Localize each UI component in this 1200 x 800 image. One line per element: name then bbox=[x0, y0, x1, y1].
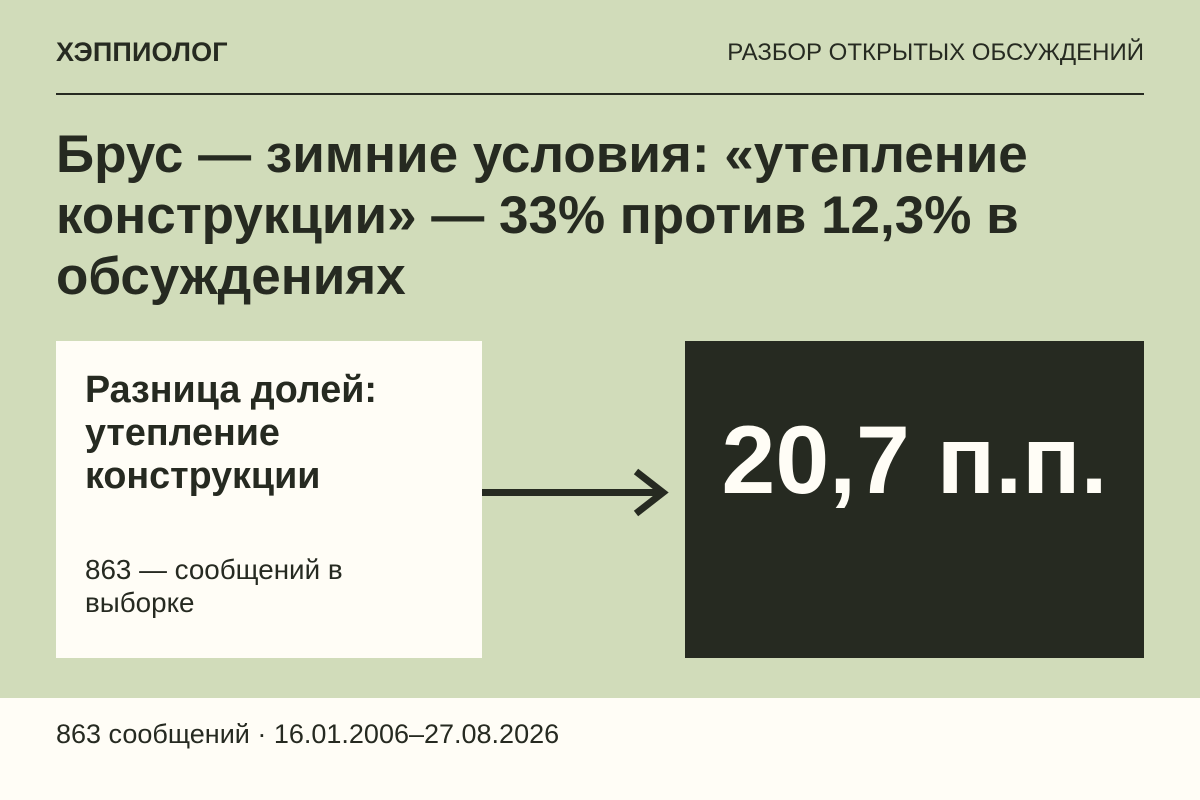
brand name: ХЭППИОЛОГ bbox=[56, 37, 228, 67]
title: конструкции» — 33% против 12,3% в bbox=[56, 186, 1019, 245]
footer band bbox=[0, 698, 1200, 800]
metric value text: 20,7 п.п. bbox=[721, 405, 1108, 514]
sample size note: 863 — сообщений в bbox=[85, 554, 343, 585]
footer text: 863 сообщений · 16.01.2006–27.08.2026 bbox=[56, 719, 559, 749]
panel heading: утепление bbox=[85, 411, 280, 453]
panel: metric value bbox=[685, 341, 1144, 658]
title bbox=[56, 125, 1028, 306]
header caption: РАЗБОР ОТКРЫТЫХ ОБСУЖДЕНИЙ bbox=[727, 39, 1144, 66]
title: Брус — зимние условия: «утепление bbox=[56, 125, 1028, 184]
sample size note bbox=[85, 554, 343, 618]
panel heading: Разница долей: bbox=[85, 368, 377, 410]
sample size note: выборке bbox=[85, 587, 195, 618]
panel heading bbox=[85, 368, 377, 496]
arrow bbox=[482, 468, 669, 516]
title: обсуждениях bbox=[56, 247, 406, 306]
panel: metric description bbox=[56, 341, 482, 658]
panel heading: конструкции bbox=[85, 454, 320, 496]
